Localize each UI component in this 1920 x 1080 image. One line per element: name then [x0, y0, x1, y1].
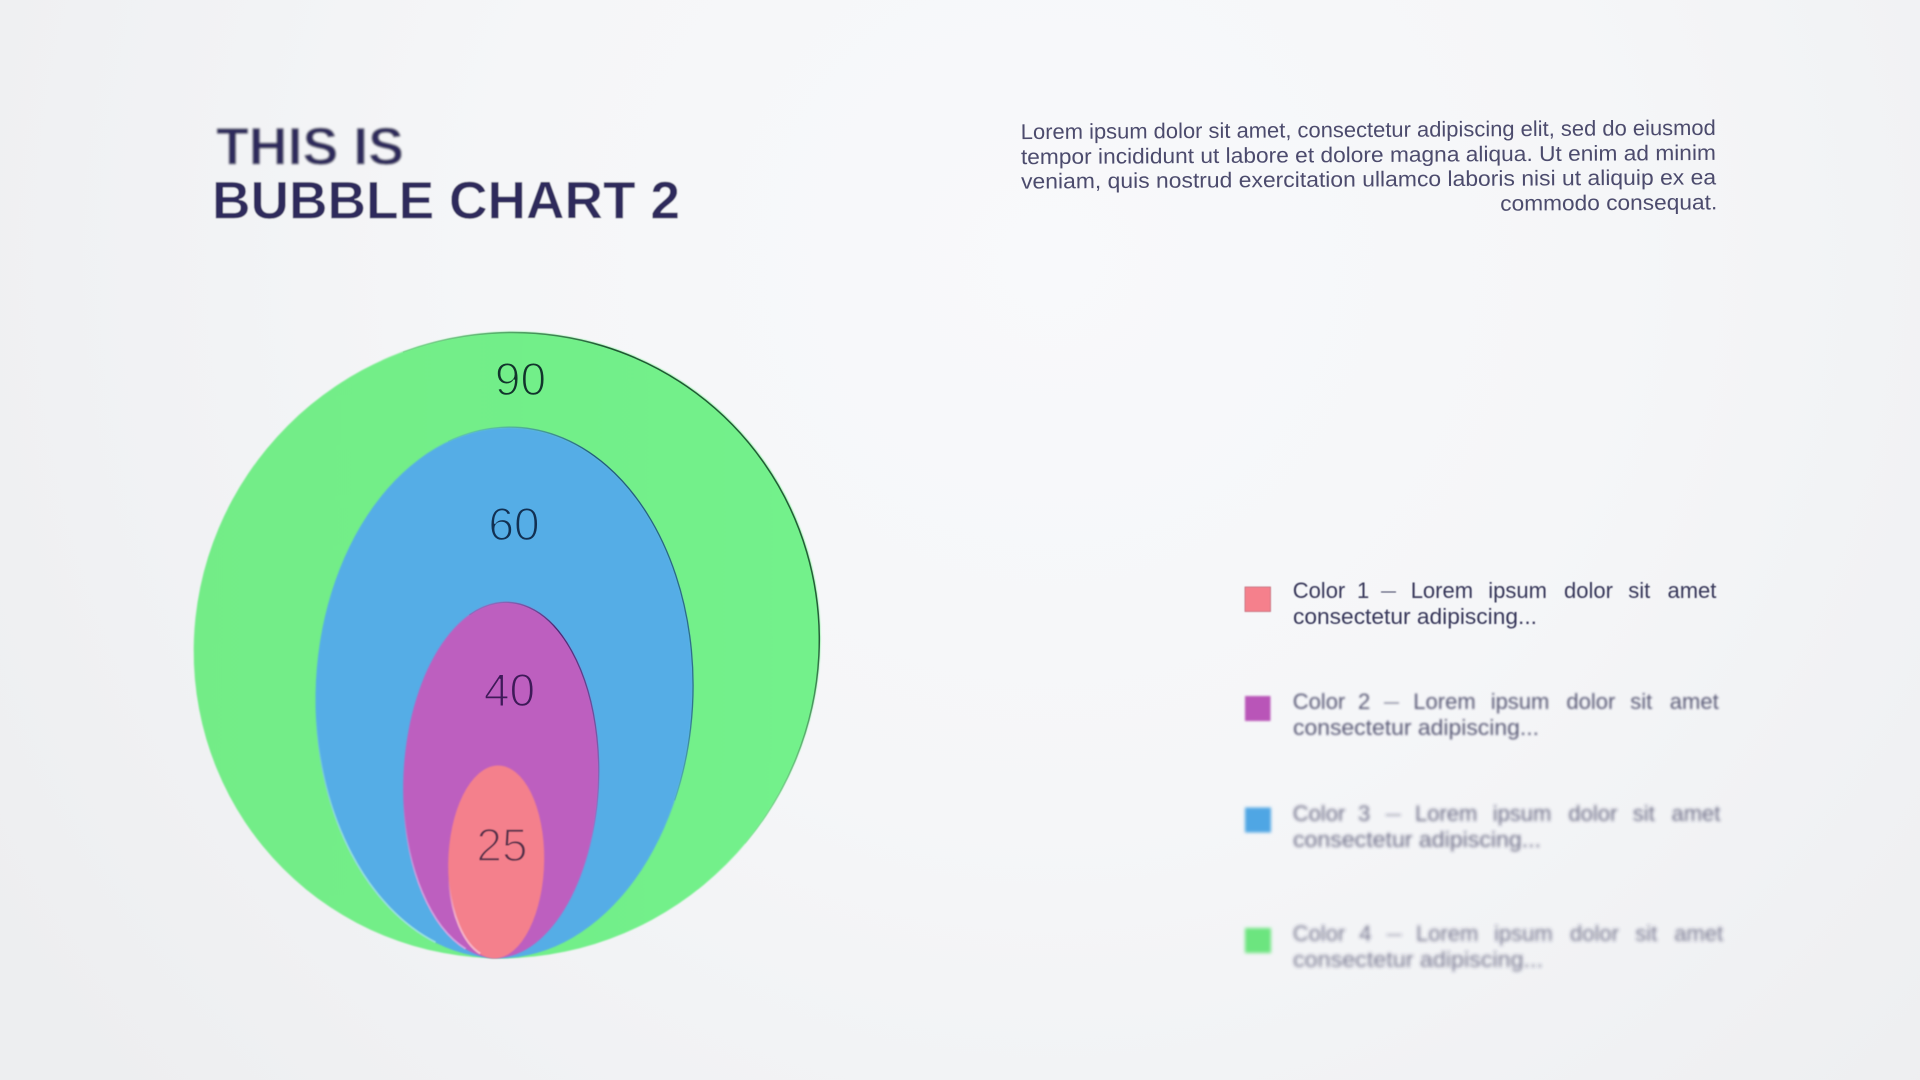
legend item: color 4: sit: [1635, 921, 1657, 946]
legend item: color 2: consectetur adipiscing...: [1293, 715, 1539, 740]
value label 60: 60: [488, 498, 540, 550]
legend item: color 2: 2: [1358, 689, 1370, 714]
legend item: color 2: [1245, 687, 1719, 740]
legend item: color 3: sit: [1633, 801, 1655, 826]
intro text block: commodo consequat.: [1500, 190, 1717, 216]
legend item: color 1: amet: [1668, 578, 1716, 603]
legend item: color 1: ipsum: [1488, 578, 1547, 603]
intro text block: veniam, quis nostrud exercitation ullamco laboris nisi ut aliquip ex ea: [1021, 165, 1716, 194]
title: BUBBLE CHART 2: [212, 172, 680, 230]
legend item: color 3: 3: [1358, 801, 1370, 826]
legend item: color 1: sit: [1628, 578, 1650, 603]
legend item: color 4: 4: [1359, 921, 1372, 946]
value label 40: 40: [484, 664, 535, 716]
legend item: color 4: ipsum: [1494, 921, 1553, 946]
legend item: color 4: —: [1387, 926, 1402, 943]
legend item: color 3: Color: [1293, 801, 1345, 826]
intro text block: Lorem ipsum dolor sit amet, consectetur adipiscing elit, sed do eiusmod: [1021, 116, 1716, 144]
legend item: color 4: [1245, 919, 1723, 972]
legend item: color 4: consectetur adipiscing...: [1293, 947, 1543, 972]
legend item: color 1: [1245, 576, 1716, 629]
legend item: color 1: consectetur adipiscing...: [1293, 604, 1537, 629]
legend item: color 1: Lorem: [1411, 578, 1473, 603]
legend item: color 2: amet: [1670, 689, 1719, 714]
bubble: 60 blue: [312, 426, 697, 960]
bubble: 90 green: [191, 329, 823, 961]
intro text block: tempor incididunt ut labore et dolore magna aliqua. Ut enim ad minim: [1021, 141, 1716, 169]
value label 90: 90: [495, 353, 546, 405]
legend item: color 1: 1: [1357, 578, 1369, 603]
legend item: color 4: Color: [1293, 921, 1345, 946]
legend item: color 2: Lorem: [1413, 689, 1476, 714]
legend item: color 2: ipsum: [1491, 689, 1549, 714]
legend: [1245, 576, 1723, 972]
legend item: color 3: Lorem: [1415, 801, 1477, 826]
title: [212, 118, 680, 230]
legend item: color 2: dolor: [1566, 689, 1615, 714]
legend item: color 3: [1245, 799, 1720, 852]
legend item: color 1: dolor: [1564, 578, 1613, 603]
intro text block: [1021, 116, 1717, 219]
title: THIS IS: [216, 118, 404, 176]
legend item: color 4: Lorem: [1416, 921, 1478, 946]
bubble: 25 pink: [447, 764, 545, 960]
legend item: color 1: —: [1381, 583, 1396, 600]
legend item: color 3: dolor: [1568, 801, 1617, 826]
legend item: color 2: —: [1384, 694, 1399, 711]
legend item: color 3: ipsum: [1493, 801, 1551, 826]
legend item: color 2: sit: [1630, 689, 1652, 714]
legend item: color 4: dolor: [1570, 921, 1619, 946]
legend item: color 3: amet: [1672, 801, 1720, 826]
legend item: color 4: amet: [1674, 921, 1723, 946]
legend item: color 1: Color: [1293, 578, 1345, 603]
legend item: color 2: Color: [1293, 689, 1345, 714]
bubble: 40 purple: [400, 599, 602, 961]
legend item: color 3: —: [1386, 806, 1401, 823]
value label 25: 25: [476, 819, 528, 871]
nested bubble chart: [191, 329, 823, 961]
legend item: color 3: consectetur adipiscing...: [1293, 827, 1541, 852]
